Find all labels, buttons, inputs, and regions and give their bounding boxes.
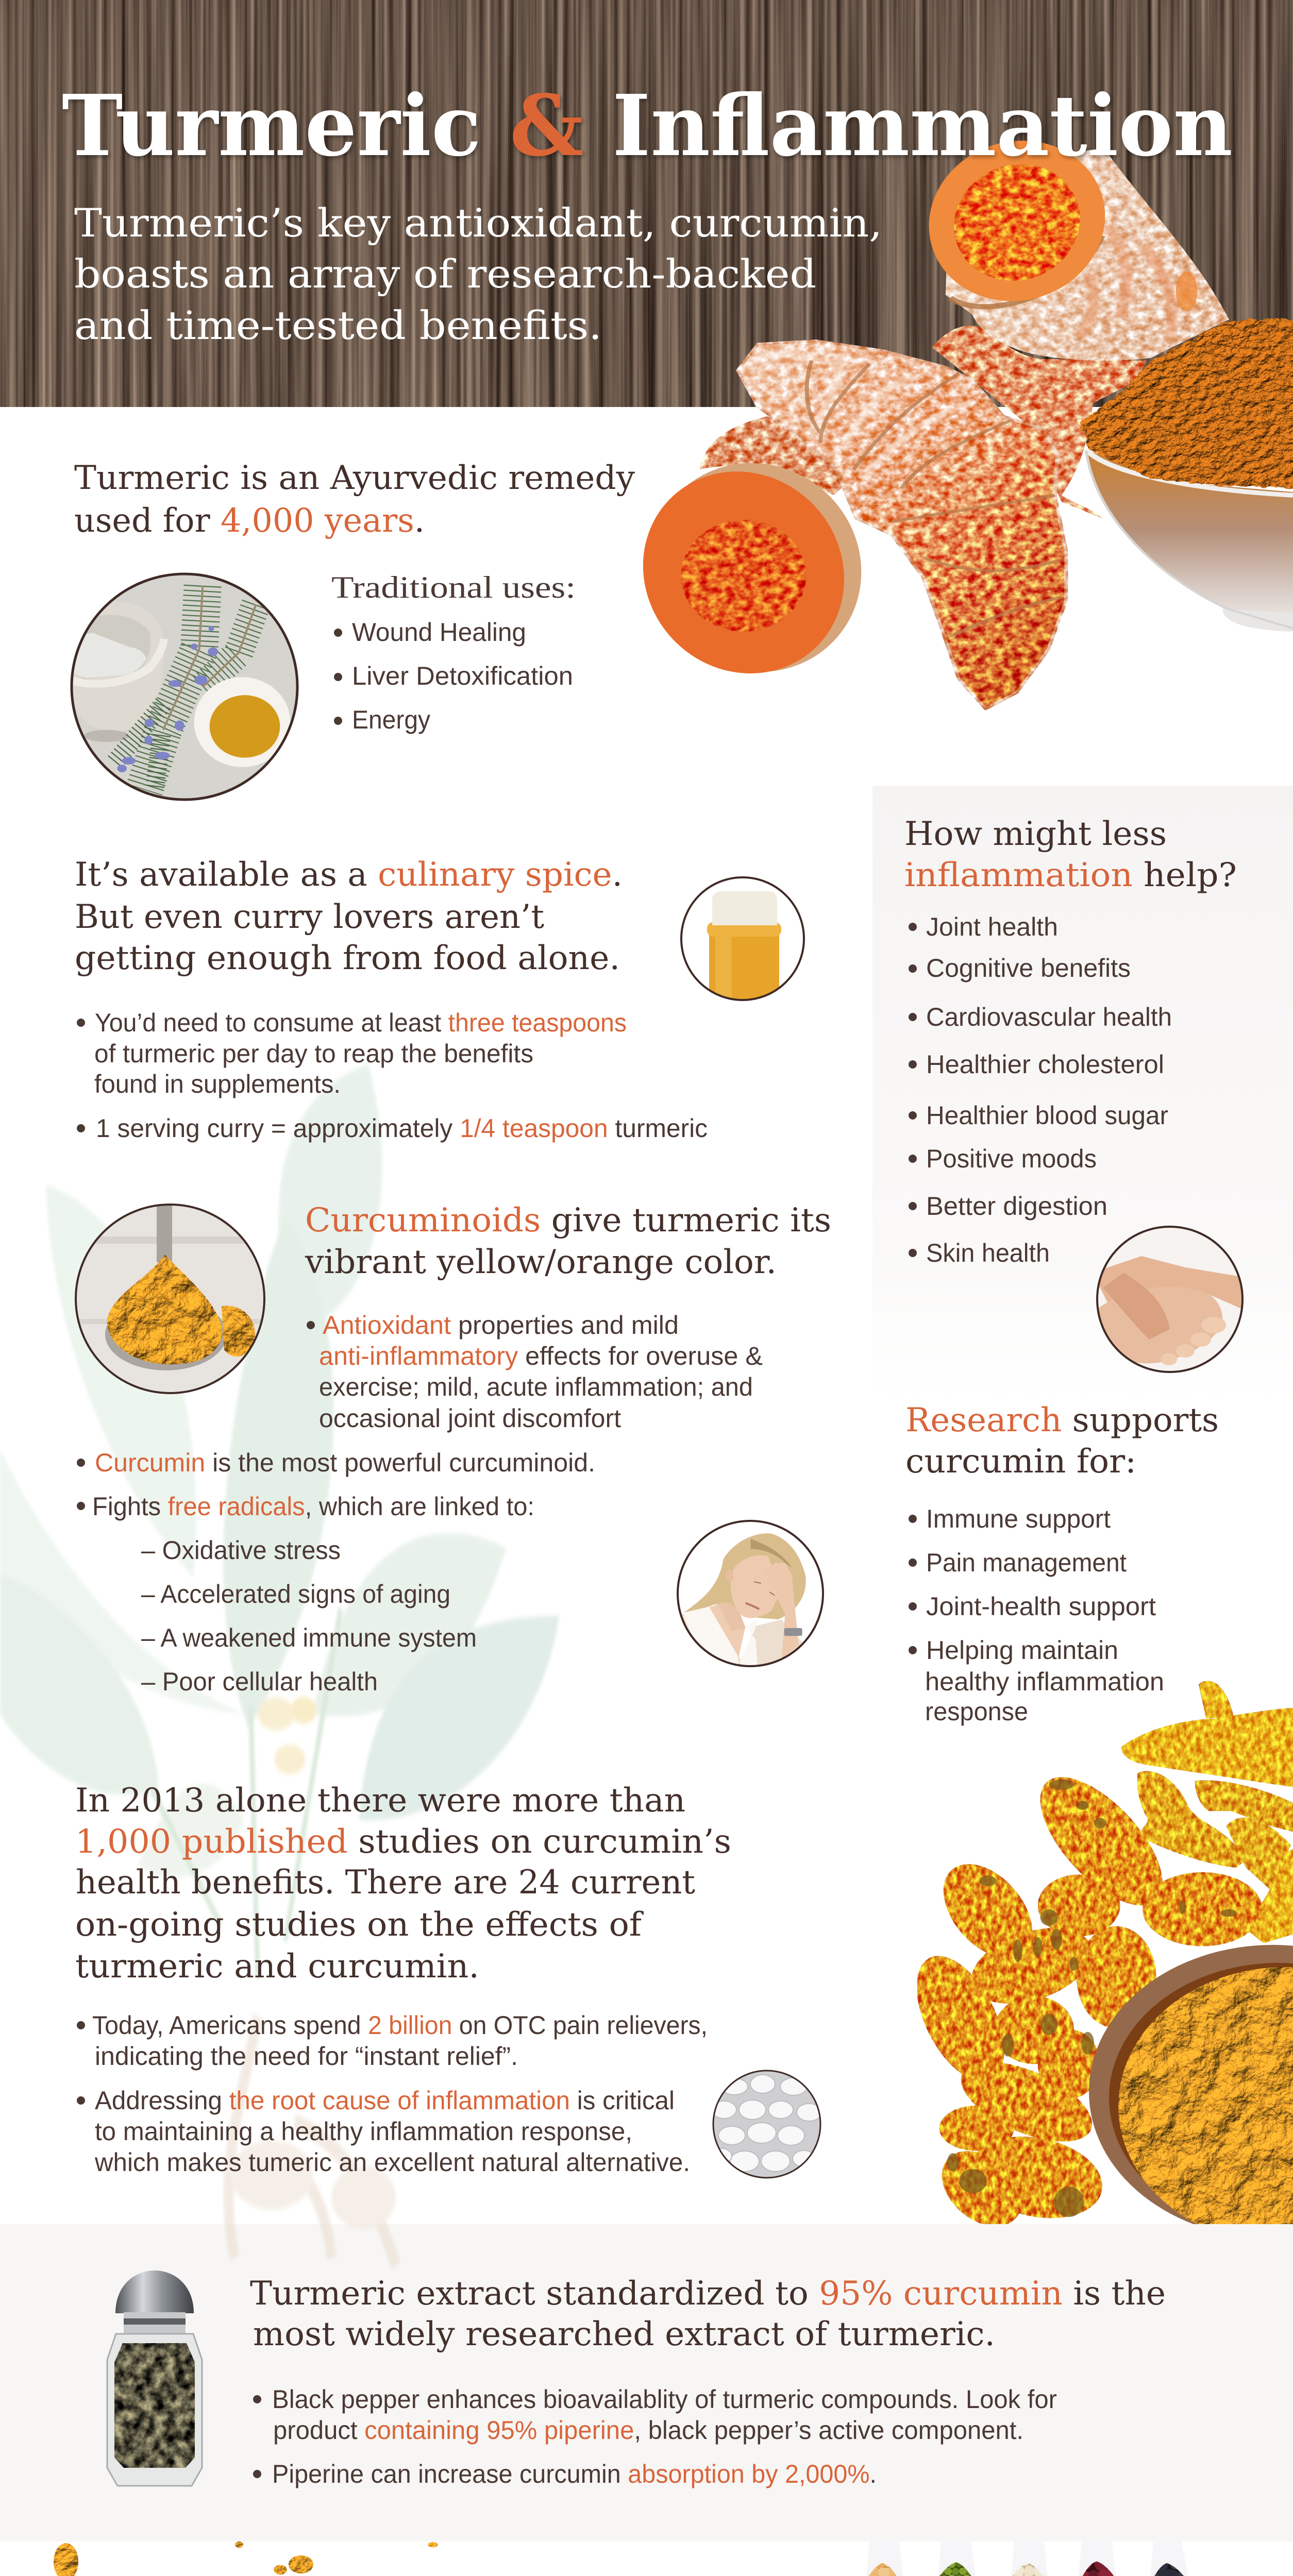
heading: curcumin for: <box>905 1443 1136 1481</box>
heading: Ayurvedic remedy: Turmeric is an Ayurvedic remedy <box>74 459 635 497</box>
subtitle: and time-tested benefits. <box>74 302 602 348</box>
list of research areas <box>909 1504 1164 1726</box>
text block: curcumin and free radicals <box>77 1448 595 1696</box>
rhizomes <box>901 1681 1293 2240</box>
heading: curcuminoids <box>305 1201 831 1281</box>
cut face <box>915 132 1119 310</box>
list of research areas: Helping maintain <box>926 1636 1118 1665</box>
heading: 2013 studies <box>75 1782 731 1986</box>
heading: 95% curcumin extract: most widely researched extract of turmeric. <box>253 2315 995 2353</box>
heading: 2013 studies: 1,000 published studies on curcumin’s <box>75 1823 731 1861</box>
text block: pain relievers <box>77 2011 708 2177</box>
heading: 2013 studies: health benefits. There are 24 current <box>76 1863 695 1902</box>
text block: black pepper and piperine: Black pepper enhances bioavailablity of turmeric compounds. Look for <box>272 2385 1057 2414</box>
text block: antioxidant properties: exercise; mild, acute inflammation; and <box>319 1372 753 1401</box>
bowl: glass <box>1086 449 1293 632</box>
text block: teaspoons bullets <box>77 1008 708 1143</box>
heading: culinary spice: getting enough from food alone. <box>75 939 620 977</box>
text block: antioxidant properties: Antioxidant properties and mild <box>323 1311 679 1340</box>
green mung beans <box>919 2562 988 2576</box>
root: sliced piece with cut face <box>630 458 871 681</box>
icon: mortar, rosemary and turmeric bowl <box>67 569 304 806</box>
text block: black pepper and piperine <box>253 2385 1057 2488</box>
list of research areas: Joint-health support <box>926 1592 1156 1621</box>
text block: curcumin and free radicals: – A weakened immune system <box>141 1623 477 1652</box>
panel: wood header background <box>0 0 1293 407</box>
illustration: faint turmeric plant watermark <box>0 1064 559 2266</box>
heading: 2013 studies: turmeric and curcumin. <box>75 1947 479 1986</box>
text block: pain relievers: which makes tumeric an excellent natural alternative. <box>94 2148 690 2177</box>
illustration: spilled turmeric powder pile <box>0 2541 585 2576</box>
illustration: spoons of beans <box>849 2541 1208 2576</box>
heading: inflammation help? <box>904 856 1237 894</box>
root: back left <box>700 416 852 495</box>
text block: curcumin and free radicals: Fights free radicals, which are linked to: <box>92 1492 534 1521</box>
list of research areas: healthy inflammation <box>925 1667 1164 1696</box>
text block: curcumin and free radicals: – Accelerated signs of aging <box>141 1580 450 1608</box>
icon: white pills <box>711 2069 822 2180</box>
heading: culinary spice <box>75 856 623 977</box>
title: Turmeric & Inflammation <box>62 77 1233 175</box>
black beans <box>1140 2563 1208 2576</box>
text block: teaspoons bullets: found in supplements. <box>94 1070 341 1098</box>
heading: Ayurvedic remedy: used for 4,000 years. <box>74 502 425 540</box>
text block: traditional uses: Energy <box>352 705 430 734</box>
illustration: dried turmeric rhizomes and wooden bowl <box>901 1681 1293 2245</box>
heading: culinary spice: It’s available as a culinary spice. <box>75 856 623 894</box>
subtitle: boasts an array of research-backed <box>74 251 816 297</box>
icon: hands massaging foot <box>1093 1225 1247 1375</box>
root: long central rhizome <box>738 341 1066 709</box>
text block: traditional uses: Traditional uses: <box>331 570 576 604</box>
scattered crumbs <box>54 2541 580 2576</box>
text block: pain relievers: Today, Americans spend 2 billion on OTC pain relievers, <box>92 2011 708 2040</box>
spoon handles <box>849 2541 1208 2576</box>
heading: 2013 studies: on-going studies on the effects of <box>75 1906 644 1944</box>
dark spots <box>947 1780 1237 2217</box>
text block: antioxidant properties: occasional joint discomfort <box>319 1404 621 1433</box>
list of benefits: Cognitive benefits <box>926 954 1131 982</box>
text block: black pepper and piperine: Piperine can increase curcumin absorption by 2,000%. <box>272 2460 877 2488</box>
list of benefits: Joint health <box>926 912 1058 941</box>
heading: 2013 studies: In 2013 alone there were more than <box>75 1782 685 1820</box>
text block: antioxidant properties: anti-inflammatory effects for overuse & <box>319 1342 763 1370</box>
icon: pepper shaker <box>107 2270 202 2486</box>
list of benefits <box>909 912 1172 1267</box>
text block: pain relievers: indicating the need for “instant relief”. <box>95 2042 518 2071</box>
root: back right <box>932 326 1147 518</box>
list of research areas: response <box>925 1697 1028 1726</box>
text block: teaspoons bullets: of turmeric per day to reap the benefits <box>94 1039 533 1068</box>
subtitle <box>74 200 882 348</box>
text block: curcumin and free radicals: – Oxidative stress <box>141 1536 341 1565</box>
text block: teaspoons bullets: 1 serving curry = approximately 1/4 teaspoon turmeric <box>96 1114 708 1143</box>
heading <box>905 1401 1219 1481</box>
panel: grey band behind extract section <box>0 2224 1293 2541</box>
list of research areas: Pain management <box>926 1548 1127 1577</box>
bowl: orange powder mound <box>1080 318 1293 489</box>
heading: How might less <box>904 815 1167 853</box>
list of research areas: Immune support <box>926 1504 1111 1533</box>
list of benefits: Skin health <box>926 1239 1050 1267</box>
yellow lentils <box>851 2563 914 2576</box>
text block: pain relievers: to maintaining a healthy inflammation response, <box>95 2117 632 2146</box>
list of benefits: Healthier blood sugar <box>926 1101 1168 1130</box>
list of benefits: Positive moods <box>926 1144 1097 1173</box>
panel: right column tinted background <box>872 786 1293 1404</box>
heading: culinary spice: But even curry lovers aren’t <box>75 898 544 936</box>
heading: 95% curcumin extract: Turmeric extract standardized to 95% curcumin is the <box>250 2275 1166 2313</box>
root: top cut piece <box>915 132 1229 361</box>
text block: antioxidant properties <box>307 1311 763 1433</box>
subtitle: Turmeric’s key antioxidant, curcumin, <box>74 200 882 246</box>
list of benefits: Better digestion <box>926 1192 1107 1221</box>
heading: curcuminoids: vibrant yellow/orange color. <box>305 1243 777 1281</box>
list of benefits: Cardiovascular health <box>926 1003 1172 1031</box>
icon: turmeric supplement jar <box>680 876 804 1006</box>
red kidney beans <box>1070 2562 1134 2576</box>
panel: research supports curcumin <box>905 1401 1219 1726</box>
text block: curcumin and free radicals: Curcumin is the most powerful curcuminoid. <box>95 1448 595 1477</box>
list of benefits: Healthier cholesterol <box>926 1050 1164 1079</box>
heading: Ayurvedic remedy <box>74 459 635 540</box>
text block: teaspoons bullets: You’d need to consume at least three teaspoons <box>95 1008 627 1037</box>
text block: traditional uses <box>331 570 576 734</box>
powder in bowl <box>1118 1967 1293 2245</box>
text block: black pepper and piperine: product containing 95% piperine, black pepper’s active component. <box>273 2416 1023 2445</box>
text block: pain relievers: Addressing the root cause of inflammation is critical <box>95 2086 675 2115</box>
heading: Research supports <box>905 1401 1219 1439</box>
icon: spoon of turmeric powder <box>72 1200 268 1396</box>
white beans <box>997 2563 1061 2576</box>
heading: curcuminoids: Curcuminoids give turmeric its <box>305 1201 831 1240</box>
text block: curcumin and free radicals: – Poor cellular health <box>141 1667 378 1696</box>
illustration: fresh turmeric roots and bowl of powder <box>630 132 1293 709</box>
text block: traditional uses: Wound Healing <box>352 618 526 647</box>
wooden bowl rim <box>1089 1945 1293 2239</box>
heading <box>904 815 1237 894</box>
panel: how might less inflammation help <box>904 815 1247 1375</box>
icon: woman with headache <box>675 1520 825 1669</box>
heading: 95% curcumin extract <box>250 2275 1166 2353</box>
text block: traditional uses: Liver Detoxification <box>352 662 573 690</box>
